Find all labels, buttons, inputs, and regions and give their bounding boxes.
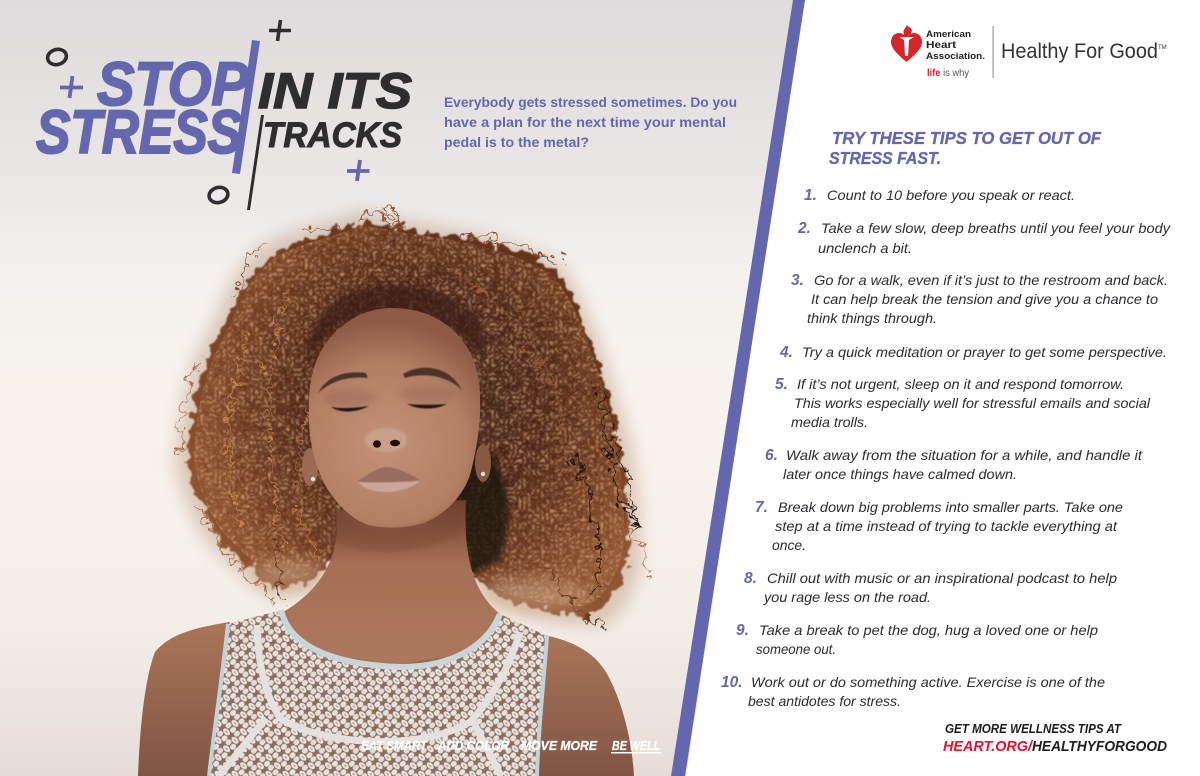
nose	[365, 428, 407, 452]
intro text: have a plan for the next time your mental	[444, 115, 726, 130]
ear left	[302, 448, 318, 486]
call to action: HEART.ORG/	[943, 738, 1034, 755]
tip 7	[755, 499, 1123, 553]
face	[309, 308, 480, 528]
tip 6	[765, 447, 1143, 482]
lips	[357, 467, 420, 492]
logo: american heart association	[891, 25, 1167, 79]
tip 1: 1.	[804, 187, 817, 204]
life is why: life is why	[927, 68, 969, 79]
tip 7: once.	[772, 537, 806, 553]
tip 2: unclench a bit.	[818, 240, 912, 256]
tip 8: 8.	[744, 570, 757, 587]
call to action	[943, 722, 1167, 755]
right white panel	[686, 0, 1200, 776]
tip 5: This works especially well for stressful emails and social	[794, 395, 1151, 411]
arm right	[530, 634, 634, 776]
tip 9: Take a break to pet the dog, hug a loved one or help	[759, 622, 1098, 638]
tip 7: Break down big problems into smaller parts. Take one	[778, 499, 1123, 515]
tip 4: 4.	[779, 344, 793, 361]
tip 5: If it’s not urgent, sleep on it and respond tomorrow.	[797, 376, 1124, 392]
tip 10: 10.	[721, 674, 743, 691]
earring left	[311, 477, 315, 481]
plus purple left	[60, 76, 83, 98]
arm left	[138, 622, 230, 776]
logo: american heart association: Heart	[926, 39, 957, 51]
call to action: HEALTHYFORGOOD	[1032, 738, 1167, 755]
title words: in its: IN ITS	[258, 63, 412, 119]
association name: American	[926, 29, 971, 40]
title word: tracks: TRACKS	[263, 116, 402, 155]
logo: american heart association: Association.	[926, 51, 985, 62]
tip 3: Go for a walk, even if it’s just to the restroom and back.	[814, 272, 1168, 288]
plus black	[269, 20, 291, 41]
tip 9: 9.	[736, 622, 749, 639]
eyelid shadows	[324, 385, 456, 407]
tip 6: 6.	[765, 447, 778, 464]
hair halo	[175, 210, 641, 626]
tip 2: 2.	[797, 220, 811, 237]
tip 5: media trolls.	[791, 414, 868, 430]
tip 10	[721, 674, 1105, 709]
tip 8: you rage less on the road.	[763, 589, 931, 605]
pale lower curls	[250, 559, 585, 613]
tip 7: 7.	[755, 499, 768, 516]
ring bottom	[207, 185, 230, 205]
collarbone shadow	[292, 648, 490, 668]
hair curls	[175, 205, 643, 622]
tip 9: someone out.	[756, 641, 836, 657]
sleeveless lace top	[208, 610, 547, 776]
tip 3	[791, 272, 1168, 326]
tip 7: step at a time instead of trying to tackle everything at	[775, 518, 1118, 534]
chin shadow	[330, 500, 466, 552]
lace bands	[219, 625, 520, 776]
call to action: GET MORE WELLNESS TIPS AT	[945, 722, 1122, 736]
plus purple right	[347, 160, 370, 181]
tip 3: 3.	[791, 272, 804, 289]
tip 3: think things through.	[807, 310, 937, 326]
title word: stop: STOP	[97, 50, 249, 118]
tip 1: Count to 10 before you speak or react.	[827, 187, 1075, 203]
neck	[276, 500, 512, 680]
tip 4: Try a quick meditation or prayer to get some perspective.	[802, 344, 1167, 360]
wellness tagline	[361, 739, 661, 754]
photo background	[0, 0, 810, 776]
tip 10: best antidotes for stress.	[748, 693, 901, 709]
eyebrows	[318, 368, 462, 393]
wellness tagline: ADD COLOR	[437, 739, 509, 753]
tip 5	[775, 376, 1151, 430]
healthy for good: Healthy For Good	[1001, 40, 1158, 63]
title word: stress: STRESS	[36, 98, 242, 166]
ring top left	[46, 47, 68, 67]
hairline shadow	[305, 285, 485, 360]
lace fabric	[208, 610, 547, 776]
armhole trim	[209, 624, 547, 776]
neckline trim	[281, 610, 500, 667]
purple slanted stripe	[671, 0, 805, 776]
hair mass	[188, 220, 629, 614]
tips heading: TRY THESE TIPS TO GET OUT OF	[832, 128, 1102, 148]
logo divider	[992, 26, 994, 78]
tip 6: later once things have calmed down.	[783, 466, 1017, 482]
tip 8	[744, 570, 1117, 605]
ear right	[475, 444, 491, 482]
intro text	[444, 95, 737, 150]
tip 9	[736, 622, 1098, 657]
tip 5: 5.	[775, 376, 788, 393]
tip 8: Chill out with music or an inspirational podcast to help	[767, 570, 1117, 586]
purple slash	[232, 40, 260, 174]
tips heading: STRESS FAST.	[829, 148, 941, 168]
closed eyes	[331, 404, 447, 411]
icon: heart and torch	[891, 25, 922, 62]
hair texture	[194, 224, 624, 606]
tip 10: Work out or do something active. Exercise is one of the	[751, 674, 1105, 690]
dark hair around neck	[455, 440, 508, 575]
wellness tagline: EAT SMART	[361, 739, 428, 753]
title: stop stress in its tracks	[36, 20, 412, 210]
tip 2: Take a few slow, deep breaths until you feel your body	[821, 220, 1171, 236]
tip 3: It can help break the tension and give you a chance to	[811, 291, 1158, 307]
wellness tagline: MOVE MORE	[521, 739, 598, 753]
photo: woman with eyes closed	[138, 205, 643, 776]
intro text: Everybody gets stressed sometimes. Do you	[444, 95, 737, 110]
tip 6: Walk away from the situation for a while, and handle it	[786, 447, 1143, 463]
tips heading	[829, 128, 1102, 168]
logo: american heart association: TM	[1158, 45, 1167, 51]
tip 2	[797, 220, 1171, 256]
black slash	[247, 115, 264, 210]
wellness tagline: BE WELL	[612, 739, 660, 753]
intro text: pedal is to the metal?	[444, 135, 589, 150]
earring right	[481, 472, 485, 476]
